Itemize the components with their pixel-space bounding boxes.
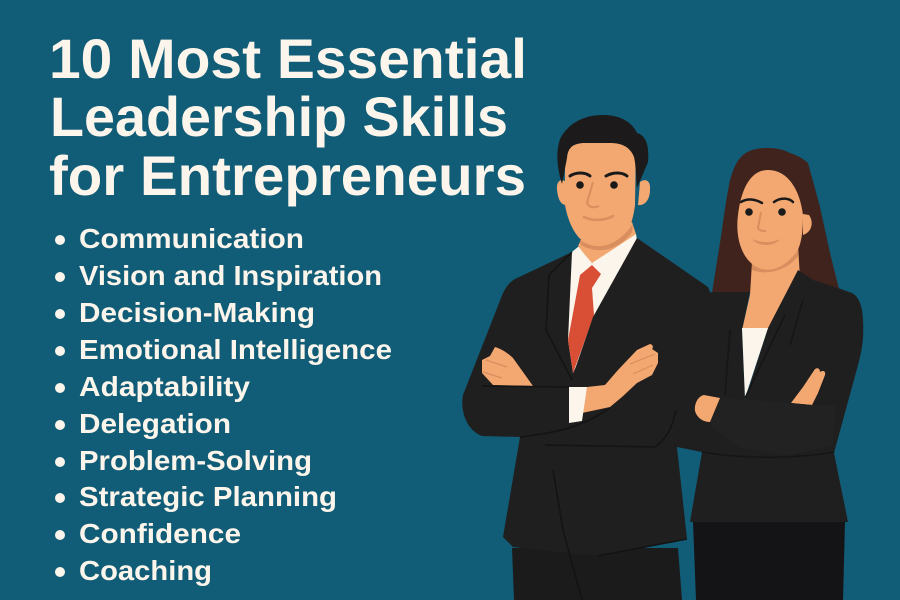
item: Emotional Intelligence: Emotional Intelligence xyxy=(79,334,392,365)
illustration: businessman xyxy=(462,115,713,600)
item: Coaching: Coaching xyxy=(79,555,212,586)
item: Strategic Planning: Strategic Planning xyxy=(79,481,337,512)
item: Confidence: Confidence xyxy=(79,518,241,549)
item: Vision and Inspiration: Vision and Inspiration xyxy=(79,260,382,291)
item: Delegation: Delegation xyxy=(79,408,231,439)
title: Leadership Skills xyxy=(50,85,508,148)
skills list xyxy=(55,223,392,586)
title: for Entrepreneurs xyxy=(49,144,526,207)
businesswoman crossed arms xyxy=(695,395,835,457)
illustration: businesswoman xyxy=(676,148,863,600)
title: 10 Most Essential xyxy=(49,27,527,90)
item: Decision-Making: Decision-Making xyxy=(79,297,315,328)
item: Problem-Solving: Problem-Solving xyxy=(79,445,312,476)
item: Communication: Communication xyxy=(79,223,304,254)
title xyxy=(49,27,527,207)
item: Adaptability: Adaptability xyxy=(79,371,250,402)
